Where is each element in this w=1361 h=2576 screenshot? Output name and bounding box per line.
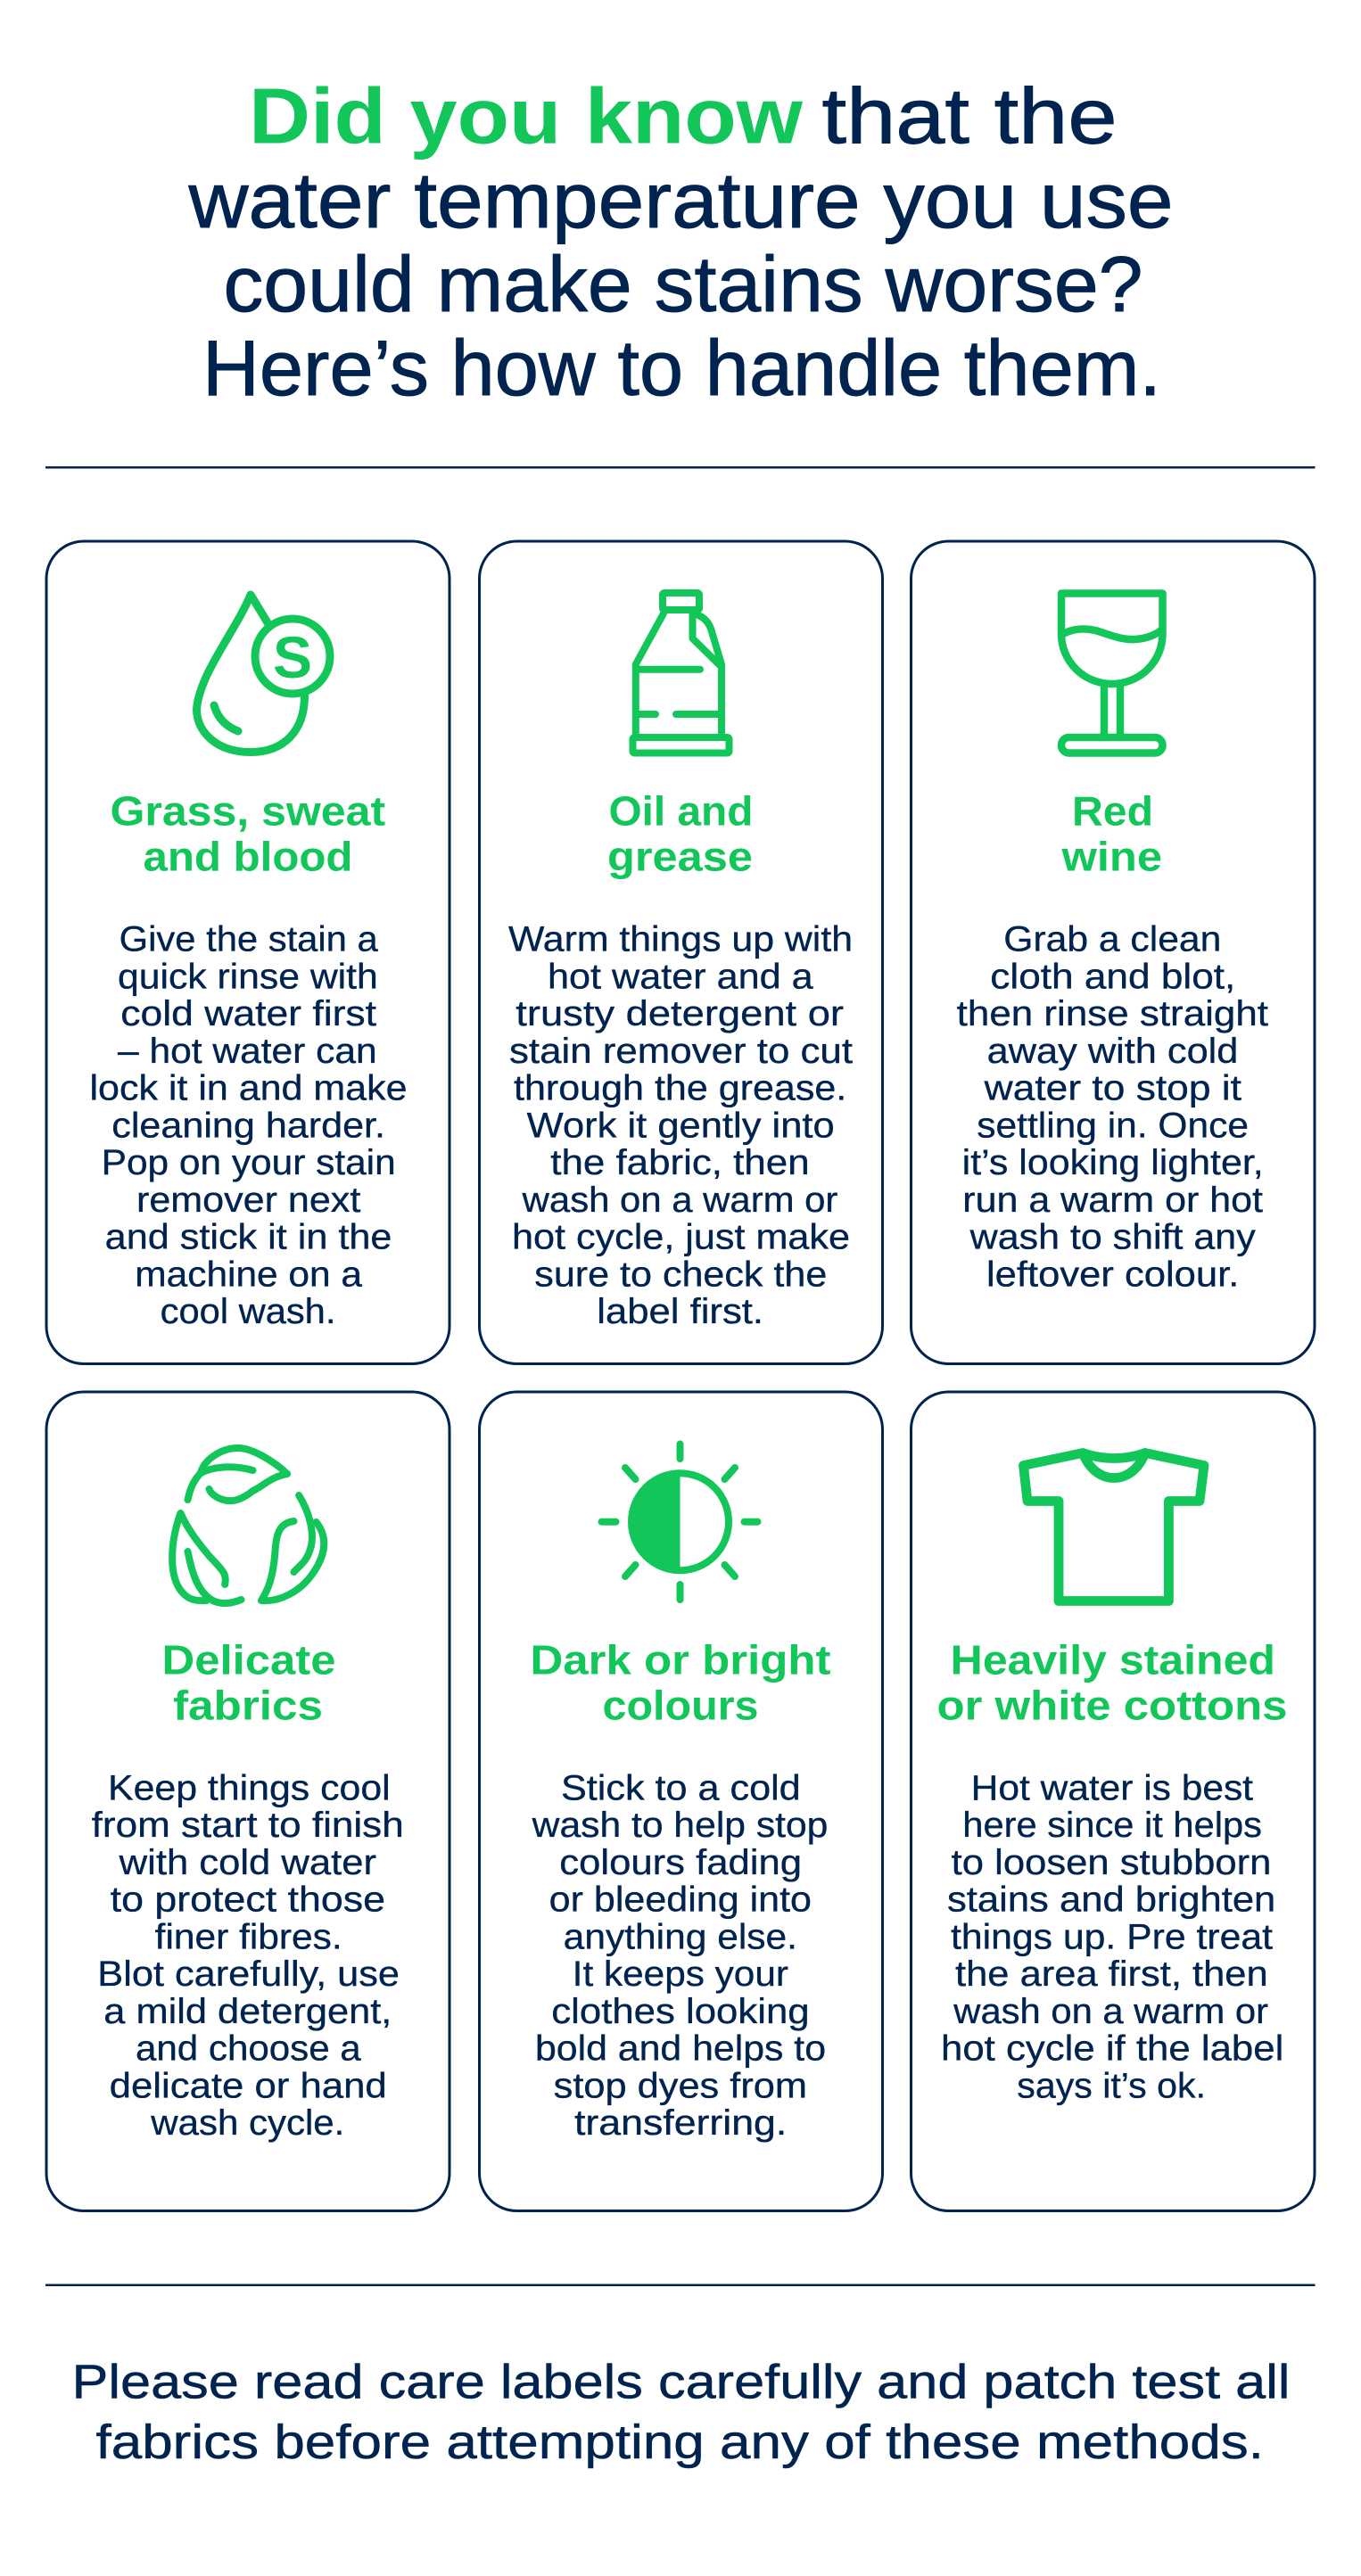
footer note: Please read care labels carefully and patch test all	[71, 2356, 1290, 2409]
title: Did you know	[249, 71, 804, 160]
body text: Warm things up with	[508, 920, 853, 959]
panel: grass, sweat and blood	[46, 541, 450, 1364]
body text: clothes looking	[551, 1992, 810, 2031]
body text: Give the stain a	[120, 920, 378, 959]
title: could make stains worse?	[223, 240, 1143, 328]
body text: lock it in and make	[89, 1069, 407, 1108]
body text: bold and helps to	[535, 2029, 826, 2069]
heading: wine	[1060, 833, 1162, 879]
body text: stop dyes from	[554, 2066, 807, 2105]
body text: It keeps your	[573, 1955, 788, 1994]
body text: cool wash.	[161, 1292, 335, 1331]
body text: hot water and a	[548, 958, 814, 997]
body text: finer fibres.	[155, 1917, 342, 1956]
panel: dark or bright colours	[480, 1392, 883, 2211]
body text: or bleeding into	[549, 1880, 812, 1919]
body text	[957, 920, 1268, 1295]
heading: Heavily stained	[951, 1636, 1275, 1683]
body text	[941, 1768, 1283, 2105]
body text: quick rinse with	[118, 958, 378, 997]
body text: and stick it in the	[105, 1218, 392, 1257]
body text: a mild detergent,	[103, 1992, 392, 2031]
title: water temperature you use	[187, 156, 1174, 244]
icon: detergent bottle	[633, 593, 730, 753]
body text: Work it gently into	[527, 1106, 835, 1145]
body text: the area first, then	[955, 1955, 1268, 1994]
body text: run a warm or hot	[962, 1181, 1263, 1220]
body text: trusty detergent or	[516, 994, 844, 1033]
heading: Dark or bright	[530, 1636, 831, 1683]
icon: stain drop: S	[273, 624, 312, 690]
body text: through the grease.	[514, 1069, 846, 1108]
body text: Hot water is best	[971, 1768, 1253, 1807]
body text: wash on a warm or	[522, 1181, 837, 1220]
heading: and blood	[143, 833, 353, 879]
heading: Grass, sweat	[111, 788, 385, 835]
body text: Blot carefully, use	[97, 1955, 400, 1994]
body text: the fabric, then	[550, 1143, 810, 1182]
heading	[111, 788, 385, 879]
body text: wash to help stop	[532, 1806, 828, 1845]
heading: colours	[603, 1682, 758, 1728]
body text: delicate or hand	[110, 2066, 387, 2105]
body text: Stick to a cold	[561, 1768, 801, 1807]
footer note: fabrics before attempting any of these methods.	[96, 2416, 1264, 2469]
body text: to loosen stubborn	[952, 1843, 1271, 1882]
body text: cold water first	[120, 994, 376, 1033]
heading	[936, 1636, 1288, 1728]
panel: red wine	[911, 541, 1315, 1364]
body text: water to stop it	[984, 1069, 1241, 1108]
title: Here’s how to handle them.	[202, 324, 1161, 412]
body text: anything else.	[564, 1917, 797, 1956]
body text: transferring.	[574, 2103, 787, 2143]
body text: machine on a	[135, 1255, 363, 1295]
body text: sure to check the	[534, 1255, 827, 1295]
body text: hot cycle if the label	[941, 2029, 1283, 2069]
title	[187, 71, 1174, 412]
heading	[162, 1636, 335, 1728]
body text: with cold water	[119, 1843, 376, 1882]
body text: colours fading	[559, 1843, 802, 1882]
body text	[92, 1768, 404, 2143]
body text: stains and brighten	[947, 1880, 1275, 1919]
panel: heavily stained or white cottons	[911, 1392, 1315, 2211]
heading	[607, 788, 753, 879]
body text: cleaning harder.	[111, 1106, 385, 1145]
body text: here since it helps	[962, 1806, 1262, 1845]
panel: oil and grease	[480, 541, 883, 1364]
body text	[89, 920, 407, 1331]
icon: three leaves	[172, 1448, 324, 1603]
body text: Keep things cool	[108, 1768, 391, 1807]
body text: wash to shift any	[969, 1218, 1256, 1257]
body text: away with cold	[987, 1032, 1238, 1071]
body text: cloth and blot,	[990, 958, 1235, 997]
heading: fabrics	[173, 1682, 323, 1728]
heading: Oil and	[608, 788, 753, 835]
body text: Pop on your stain	[102, 1143, 396, 1182]
heading: grease	[607, 833, 753, 879]
body text: label first.	[597, 1292, 763, 1331]
footer note	[71, 2356, 1290, 2469]
body text: and choose a	[136, 2029, 361, 2069]
icon: t-shirt	[1024, 1453, 1204, 1601]
body text: wash on a warm or	[953, 1992, 1268, 2031]
body text: says it’s ok.	[1017, 2066, 1206, 2105]
heading: Delicate	[162, 1636, 335, 1683]
body text: Grab a clean	[1003, 920, 1221, 959]
heading: Red	[1072, 788, 1153, 835]
icon: half sun	[601, 1444, 758, 1600]
body text: things up. Pre treat	[951, 1917, 1273, 1956]
body text: it’s looking lighter,	[962, 1143, 1264, 1182]
body text: to protect those	[111, 1880, 385, 1919]
heading	[530, 1636, 831, 1728]
title: that the	[822, 71, 1117, 160]
body text: leftover colour.	[986, 1255, 1239, 1295]
body text	[532, 1768, 828, 2143]
body text	[508, 920, 853, 1331]
body text: hot cycle, just make	[512, 1218, 850, 1257]
body text: then rinse straight	[957, 994, 1268, 1033]
icon: stain drop	[196, 595, 330, 753]
body text: wash cycle.	[150, 2103, 344, 2143]
icon: wine glass	[1061, 594, 1163, 753]
body text: remover next	[136, 1181, 360, 1220]
body text: settling in. Once	[977, 1106, 1249, 1145]
body text: stain remover to cut	[509, 1032, 853, 1071]
body text: from start to finish	[92, 1806, 404, 1845]
heading	[1060, 788, 1162, 879]
panel: delicate fabrics	[46, 1392, 450, 2211]
heading: or white cottons	[936, 1682, 1288, 1728]
body text: – hot water can	[118, 1032, 377, 1071]
